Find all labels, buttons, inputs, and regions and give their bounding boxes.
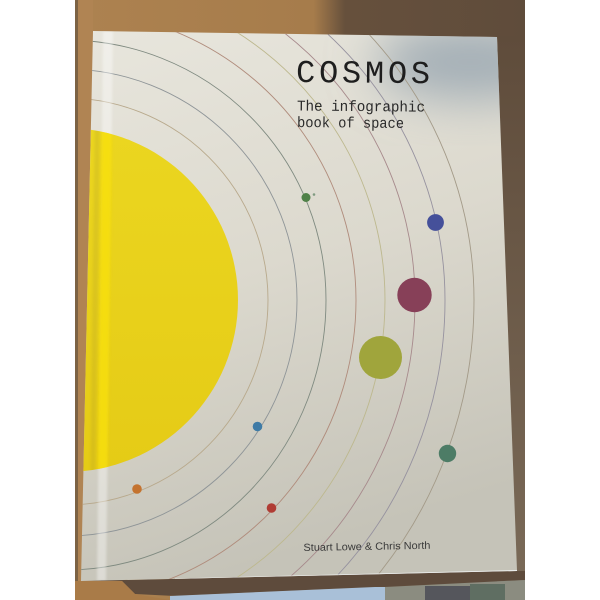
spine highlight on paper [97,31,113,581]
planet: mercury orange [132,484,142,494]
planet: jupiter olive [359,336,402,379]
subtitle [297,99,425,133]
sun [83,130,238,471]
book cover [81,31,517,581]
moon [313,193,315,196]
authors: Stuart Lowe & Chris North [303,540,431,554]
planet: venus blue [253,422,262,431]
subtitle: book of space [297,115,404,133]
planet: earth green [302,193,310,202]
objects below the table edge [170,580,525,600]
dark shadow band under the book [81,571,525,596]
planet: mars red [267,503,276,513]
lower left wood [75,581,135,600]
wooden table background [75,0,525,600]
bottom edge highlight [175,570,517,580]
title: COSMOS [296,55,430,93]
planet: uranus indigo [427,214,444,231]
photo of book cover on wooden table [75,0,525,600]
subtitle: The infographic [297,99,425,117]
shadow on upper right of cover [359,36,500,124]
planet: saturn maroon [397,278,432,312]
planet: neptune teal green [439,445,456,462]
spine highlights on sun [90,130,112,470]
orbit lines [66,28,474,582]
